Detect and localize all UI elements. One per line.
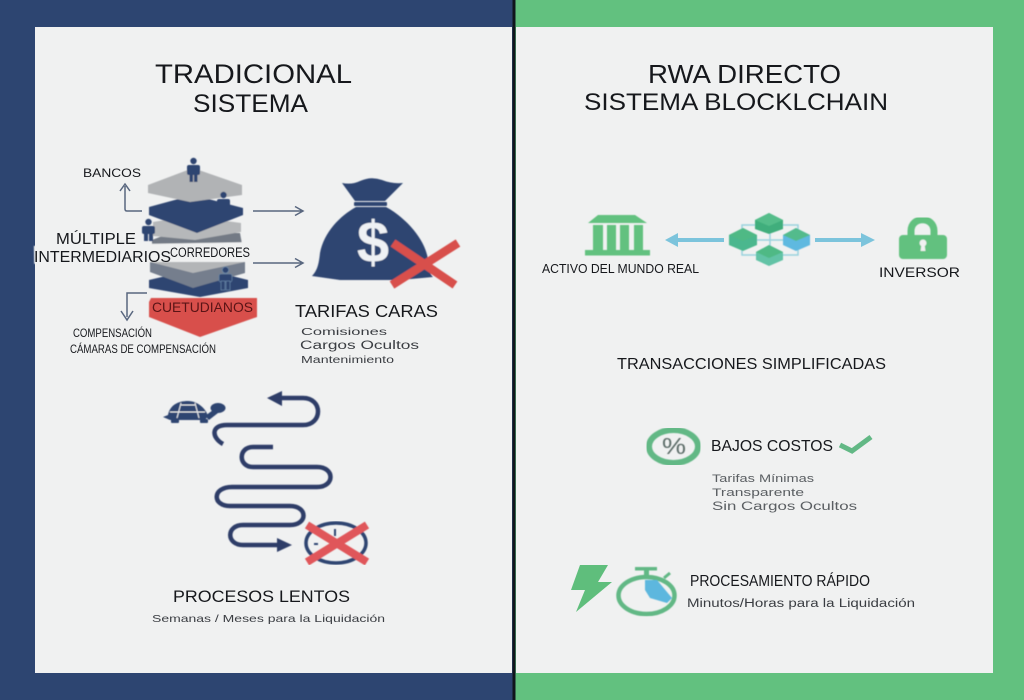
icon: lightning bolt: [571, 565, 612, 612]
text: low costs: Sin Cargos Ocultos: [712, 501, 857, 513]
label: investor: INVERSOR: [879, 264, 960, 280]
label: clearing: COMPENSACIÓN: [73, 325, 152, 340]
layer: top grey: [148, 168, 242, 202]
text: low costs: Transparente: [712, 487, 804, 499]
layer: upper navy: [149, 195, 243, 233]
label: brokers: CORREDORES: [170, 245, 250, 260]
text: slow processes: PROCESOS LENTOS: [173, 587, 350, 606]
text: expensive fees: Mantenimiento: [301, 355, 395, 366]
red cross: [392, 243, 458, 285]
label: multiple intermediaries: INTERMEDIARIOS: [34, 249, 171, 266]
title: traditional system: SISTEMA: [193, 90, 308, 118]
label: clearing: CÁMARAS DE COMPENSACIÓN: [70, 341, 216, 356]
arrow: stack to fees upper: [253, 206, 303, 216]
arrow: to investor: [815, 233, 875, 247]
cube: bottom: [756, 245, 783, 266]
label: clearing: [70, 325, 216, 356]
arrow: winding slow path: [214, 391, 330, 552]
icon: percent badge: [649, 430, 698, 463]
label: banks: BANCOS: [83, 166, 141, 180]
label: multiple intermediaries: MÚLTIPLE: [56, 231, 136, 248]
icon: money bag: [312, 178, 458, 285]
layer: lower navy: [149, 268, 248, 297]
layer: upper dark grey: [152, 233, 242, 244]
icon: padlock: [899, 220, 947, 259]
heading: simplified transactions: TRANSACCIONES SIMPLIFICADAS: [617, 356, 886, 373]
band: label background: [34, 242, 250, 264]
title: rwa direct: SISTEMA BLOCKLCHAIN: [584, 89, 888, 116]
icon: percent badge: %: [662, 433, 686, 459]
arrow: stack to fees lower: [253, 258, 303, 268]
icon: bank building: [585, 215, 650, 256]
icon: stopwatch: [618, 567, 674, 614]
text: fast processing: [687, 573, 915, 610]
text: low costs: [711, 438, 857, 513]
arrow: to banks: [120, 184, 142, 211]
icon: person lower: [219, 267, 232, 290]
text: fast processing: PROCESAMIENTO RÁPIDO: [690, 573, 870, 590]
layer: lower red: [149, 298, 257, 337]
panel: traditional system: [34, 27, 512, 673]
text: fast processing: Minutos/Horas para la Liquidación: [687, 598, 915, 610]
icon: person left: [142, 219, 155, 241]
icon: turtle: [163, 401, 226, 423]
panel: rwa direct: [516, 27, 993, 673]
layer: lower dark grey: [150, 262, 245, 288]
layer: lower light grey: [150, 262, 245, 273]
text: slow processes: [152, 587, 385, 625]
dollar sign: $: [357, 210, 389, 275]
text: slow processes: Semanas / Meses para la Liquidación: [152, 613, 385, 625]
left panel background: [0, 0, 514, 700]
icon: blockchain network: [729, 213, 810, 266]
icon: clock crossed: [306, 523, 367, 563]
text: expensive fees: TARIFAS CARAS: [295, 301, 438, 321]
icon: check mark: [840, 437, 871, 451]
text: low costs: Tarifas Mínimas: [712, 473, 815, 485]
label: custodians: CUETUDIANOS: [152, 299, 253, 315]
cube: top: [755, 213, 783, 234]
title: rwa direct: RWA DIRECTO: [648, 61, 841, 89]
text: low costs: BAJOS COSTOS: [711, 438, 833, 455]
arrow: to asset: [665, 233, 724, 247]
text: expensive fees: Cargos Ocultos: [300, 340, 419, 352]
title: traditional system: [155, 59, 352, 118]
text: expensive fees: Comisiones: [301, 326, 387, 338]
icon: person upper: [217, 192, 230, 215]
text: expensive fees: [295, 301, 438, 366]
label: real world asset: ACTIVO DEL MUNDO REAL: [542, 262, 699, 276]
center divider: [512, 0, 516, 700]
diagram: intermediary stack: [34, 158, 257, 337]
label: multiple intermediaries: [34, 231, 171, 266]
right panel background: [514, 0, 1024, 700]
arrow: to clearing: [121, 293, 147, 320]
title: rwa direct: [584, 61, 888, 116]
title: traditional system: TRADICIONAL: [155, 59, 352, 89]
icon: person top: [187, 158, 200, 182]
cube: right: [783, 228, 810, 251]
layer: upper light grey: [153, 216, 241, 240]
cube: left: [729, 228, 757, 251]
